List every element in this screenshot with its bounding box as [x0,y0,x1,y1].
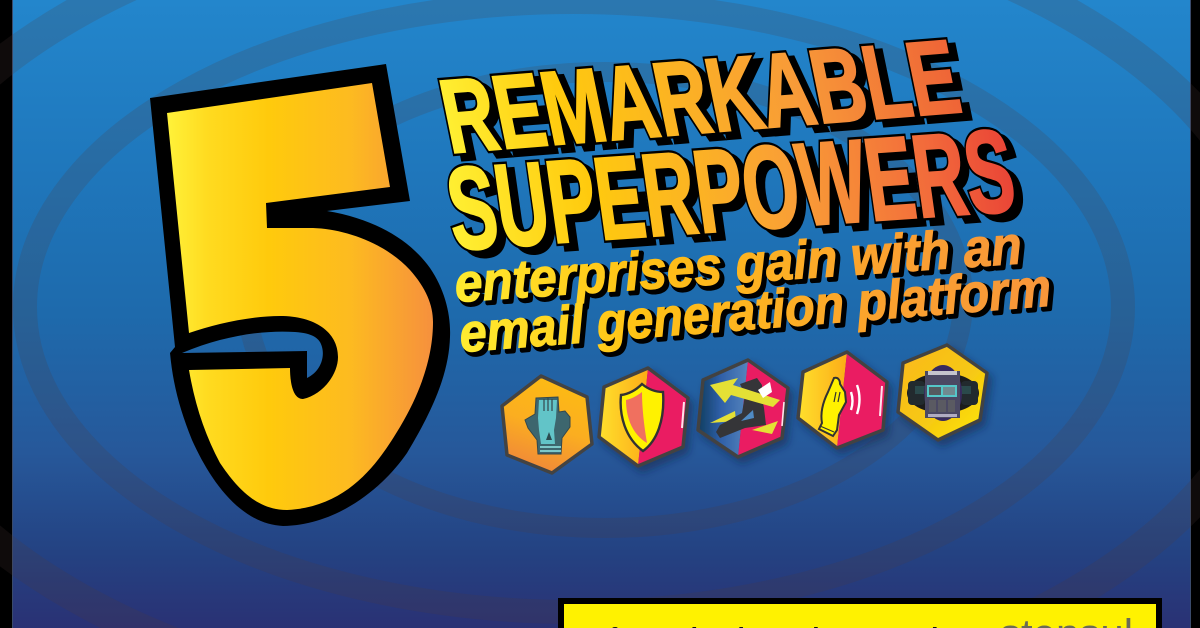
icon: glove hexagon [502,376,592,473]
subtitle line 1: enterprises gain with an [453,215,1024,314]
icon: stop hand hexagon [798,352,887,448]
subtitle line 2: email generation platform [457,258,1053,364]
big number 5 [150,64,450,526]
icon: device hexagon [898,345,987,440]
credit box [558,598,1162,628]
icon: shield hexagon [599,368,688,466]
title: SUPERPOWERS [439,105,1030,282]
title: REMARKABLE: REMARKABLE [431,19,969,176]
title: REMARKABLE: REMARKABLE [439,25,977,181]
subtitle line 2: email generation platform [460,260,1056,367]
subtitle line 1: enterprises gain with an [456,218,1027,317]
title: REMARKABLE: REMARKABLE [431,19,969,176]
title: REMARKABLE [431,19,977,182]
icon: winged boot hexagon [698,360,788,457]
